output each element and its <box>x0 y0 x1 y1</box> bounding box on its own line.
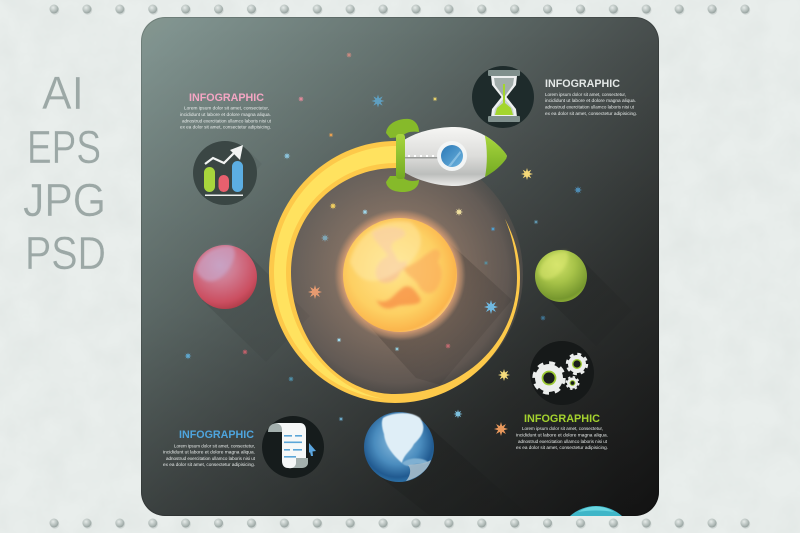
rocket body <box>404 127 507 186</box>
green planet <box>535 250 587 302</box>
rivets: top row <box>37 0 762 20</box>
format labels <box>23 67 106 279</box>
rocket seam <box>405 155 439 158</box>
format labels: EPS <box>27 121 101 173</box>
panel text: top left: ex ea dolor sit amet, consectetur adipisicing. <box>180 124 271 130</box>
panel: dark board <box>141 17 659 516</box>
format labels: JPG <box>23 174 106 226</box>
panel text: bottom left: Lorem ipsum dolor sit amet, consectetur, <box>174 443 255 448</box>
stars <box>184 52 582 436</box>
long shadows <box>202 150 632 516</box>
orbit glow <box>269 147 523 401</box>
panel text: top right: adnostrud exercitation ullamco laboris nisi ut <box>545 104 635 110</box>
red planet <box>193 245 257 309</box>
panel text: top left: adnostrud exercitation ullamco laboris nisi ut <box>182 118 272 123</box>
panel text: bottom right <box>516 413 608 450</box>
sun <box>334 209 466 341</box>
large gear <box>534 363 564 393</box>
icon: hourglass <box>472 66 534 128</box>
panel text: bottom left: adnostrud exercitation ullamco laboris nisi ut <box>166 456 256 461</box>
earth planet <box>364 412 434 482</box>
cyan planet <box>570 506 622 516</box>
panel text: bottom left: incididunt ut labore et dolore magna aliqua. <box>163 450 255 454</box>
panel text: top left: incididunt ut labore et dolore magna aliqua. <box>180 112 271 117</box>
panel text: bottom right: incididunt ut labore et dolore magna aliqua. <box>516 432 608 438</box>
panel text: bottom right: INFOGRAPHIC <box>524 413 600 425</box>
panel text: bottom right: adnostrud exercitation ullamco laboris nisi ut <box>518 439 608 444</box>
rocket fin bottom <box>386 176 419 192</box>
rocket tail band <box>396 134 405 179</box>
rocket window <box>437 141 467 171</box>
icon: bar chart <box>193 141 257 205</box>
format labels: PSD <box>25 227 106 279</box>
panel text: bottom left: INFOGRAPHIC <box>179 429 254 441</box>
panel text: top right: Lorem ipsum dolor sit amet, consectetur, <box>545 92 626 97</box>
panel text: top left: Lorem ipsum dolor sit amet, consectetur, <box>184 106 269 110</box>
icon: scroll <box>262 416 324 478</box>
panel text: bottom left: ex ea dolor sit amet, consectetur adipisicing. <box>163 462 255 467</box>
panel text: top left: INFOGRAPHIC <box>189 92 264 104</box>
icon: gears <box>530 341 594 405</box>
panel text: bottom right: ex ea dolor sit amet, consectetur adipisicing. <box>516 445 608 450</box>
panel text: bottom left <box>163 429 256 467</box>
rivets: bottom row <box>37 514 762 533</box>
medium gear <box>567 354 587 374</box>
panel text: top right: incididunt ut labore et dolore magna aliqua. <box>545 98 636 103</box>
sun surface patches <box>350 221 442 308</box>
format labels: AI <box>42 67 84 119</box>
small gear <box>566 377 579 389</box>
panel text: top right: INFOGRAPHIC <box>545 78 620 90</box>
panel text: top right: ex ea dolor sit amet, consectetur adipisicing. <box>545 111 637 116</box>
orbit ring <box>269 141 520 403</box>
panel text: top right <box>545 78 637 116</box>
rocket fin top <box>386 119 419 138</box>
panel text: top left <box>180 92 272 130</box>
rocket <box>386 119 507 192</box>
rocket nose <box>485 136 507 177</box>
panel text: bottom right: Lorem ipsum dolor sit amet, consectetur, <box>522 426 603 431</box>
